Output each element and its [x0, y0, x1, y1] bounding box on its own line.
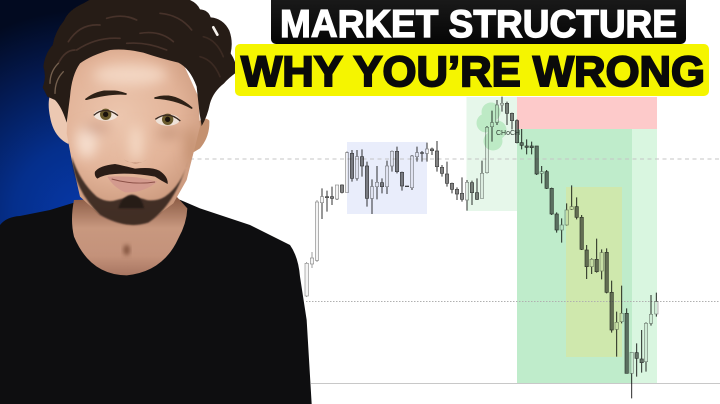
- horizontal price levels: [190, 159, 720, 384]
- chart: candlestick price action with zones: [190, 97, 720, 398]
- green take-profit zone: [517, 129, 632, 383]
- mouth line: [112, 179, 155, 183]
- red stop-loss zone: [517, 97, 657, 129]
- green CHoCH circles: [476, 102, 506, 150]
- beard stubble along jaw: [72, 157, 188, 225]
- lighter green take-profit extension: [632, 129, 657, 383]
- soul patch: [118, 195, 144, 208]
- neck: [72, 197, 187, 275]
- mouth: [107, 176, 157, 192]
- yellow-green inner zone: [566, 187, 622, 357]
- blue studio backdrop: [0, 0, 110, 240]
- right eye: [155, 114, 180, 126]
- left ear: [49, 95, 72, 144]
- light green order-block zone: [466, 97, 522, 211]
- heading: why you're wrong: WHY YOU’RE WRONG: [241, 48, 705, 96]
- moustache: [95, 164, 168, 184]
- nose shadow: [124, 159, 147, 163]
- right ear: [192, 119, 209, 153]
- blue range box: [347, 142, 427, 214]
- neck dimple shadow: [123, 245, 130, 255]
- black t-shirt: [0, 198, 312, 404]
- candlesticks: left and middle section: [305, 97, 519, 297]
- title bar: yellow: [235, 44, 709, 96]
- right eyebrow: [155, 96, 192, 108]
- candlesticks: sell-off section: [520, 129, 658, 398]
- left eyebrow: [86, 91, 126, 99]
- facial highlights: [76, 64, 196, 167]
- CHoCH label: CHoCH: [496, 130, 520, 137]
- heading: market structure: MARKET STRUCTURE: [280, 3, 677, 46]
- yellow bar background: [235, 44, 709, 96]
- title: [235, 0, 709, 96]
- black bar background: [271, 0, 686, 44]
- face: [67, 40, 200, 227]
- hair: [43, 0, 236, 126]
- left eye: [94, 109, 118, 121]
- presenter portrait: [0, 0, 312, 404]
- hair texture: [50, 13, 223, 93]
- title bar: black: [271, 0, 686, 46]
